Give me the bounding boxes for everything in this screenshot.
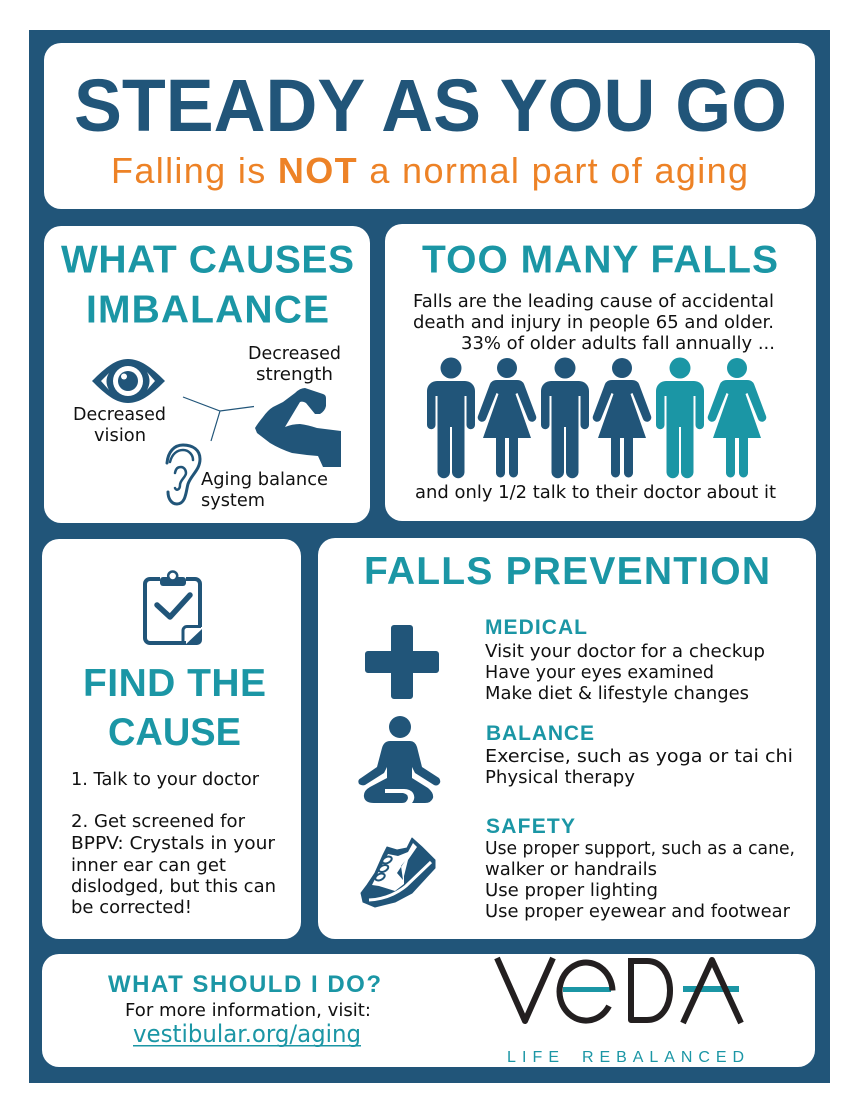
- section: balance: Exercise, such as yoga or tai chi: [485, 746, 793, 767]
- label: decreased vision: [73, 404, 166, 446]
- heading: what causes imbalance: [61, 238, 354, 332]
- section: safety: Use proper lighting: [485, 880, 658, 901]
- text: steps: [71, 769, 276, 918]
- icon: clipboard: [145, 572, 202, 645]
- subtitle: Falling is NOT a normal part of aging: [111, 150, 748, 191]
- text: steps: 2. Get screened for: [71, 811, 246, 832]
- text: falls statistics: 33% of older adults fall annually ...: [461, 333, 775, 354]
- text: steps: 1. Talk to your doctor: [71, 769, 260, 790]
- heading: find the cause: CAUSE: [108, 711, 241, 754]
- panel: title: [44, 43, 815, 209]
- label: decreased strength: Decreased: [248, 343, 341, 364]
- section: balance: BALANCE: [486, 722, 594, 745]
- connector lines: [183, 397, 254, 441]
- text: steps: dislodged, but this can: [71, 876, 276, 897]
- section: balance: [485, 722, 793, 788]
- section: medical: MEDICAL: [485, 616, 587, 639]
- section: safety: SAFETY: [486, 815, 575, 838]
- text: steps: BPPV: Crystals in your: [71, 833, 276, 854]
- section: medical: [485, 616, 765, 704]
- tagline: REBALANCED: [582, 1049, 744, 1066]
- heading: what should i do: WHAT SHOULD I DO?: [108, 971, 381, 998]
- panel: falls prevention: [318, 538, 816, 939]
- heading: steady as you go: STEADY AS YOU GO: [74, 64, 787, 147]
- section: safety: Use proper support, such as a cane,: [485, 838, 795, 859]
- label: decreased strength: [248, 343, 341, 385]
- panel: too many falls: [385, 224, 816, 521]
- logo: veda: [497, 958, 744, 1066]
- text: falls statistics: Falls are the leading cause of accidental: [413, 291, 774, 312]
- label: aging balance system: system: [201, 490, 265, 511]
- icon: ear: [167, 445, 200, 504]
- text: falls statistics: death and injury in people 65 and older.: [413, 312, 774, 333]
- text: steps: be corrected!: [71, 897, 192, 918]
- heading: find the cause: FIND THE: [83, 662, 266, 705]
- label: decreased strength: strength: [256, 364, 333, 385]
- section: medical: Make diet & lifestyle changes: [485, 683, 749, 704]
- section: safety: Use proper eyewear and footwear: [485, 901, 791, 922]
- section: medical: Visit your doctor for a checkup: [485, 641, 765, 662]
- link: vestibular.org/aging: vestibular.org/aging: [133, 1020, 361, 1048]
- icon: medical cross: [365, 625, 439, 699]
- heading: find the cause: [83, 662, 266, 754]
- heading: what causes imbalance: IMBALANCE: [86, 288, 329, 332]
- icon: meditating person: [358, 716, 440, 803]
- panel: footer: [42, 954, 815, 1067]
- section: safety: walker or handrails: [485, 859, 657, 880]
- text: steps: inner ear can get: [71, 855, 226, 876]
- panel: what causes imbalance: [44, 226, 370, 523]
- section: medical: Have your eyes examined: [485, 662, 714, 683]
- tagline: [507, 1049, 744, 1066]
- heading: what causes imbalance: WHAT CAUSES: [61, 238, 354, 282]
- text: more information: For more information, visit:: [125, 1000, 371, 1021]
- text: doctor statistic: and only 1/2 talk to their doctor about it: [415, 482, 776, 503]
- heading: too many falls: TOO MANY FALLS: [422, 238, 778, 282]
- text: falls statistics: [413, 291, 775, 354]
- label: decreased vision: vision: [94, 425, 146, 446]
- heading: falls prevention: FALLS PREVENTION: [364, 550, 770, 593]
- label: decreased vision: Decreased: [73, 404, 166, 425]
- pictogram: six people: [427, 358, 766, 478]
- icon: flexed arm: [255, 388, 341, 467]
- icon: eye: [92, 359, 165, 403]
- tagline: LIFE: [507, 1049, 559, 1066]
- section: balance: Physical therapy: [485, 767, 635, 788]
- label: aging balance system: [201, 469, 328, 511]
- icon: running shoe: [361, 838, 435, 907]
- label: aging balance system: Aging balance: [201, 469, 328, 490]
- panel: find the cause: [42, 539, 301, 939]
- section: safety: [485, 815, 795, 922]
